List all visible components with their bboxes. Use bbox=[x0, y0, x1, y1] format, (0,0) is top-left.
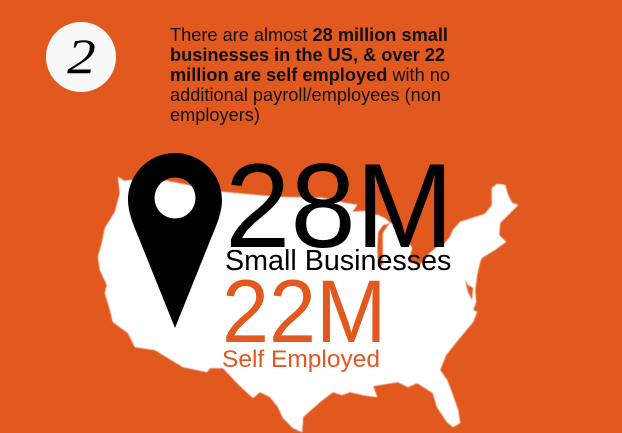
statistic: 22M: 22M bbox=[222, 262, 386, 361]
intro text: businesses in the US, & over 22 bbox=[170, 45, 445, 65]
label: Small Businesses: Small Businesses bbox=[225, 245, 451, 277]
intro text: There are almost 28 million small bbox=[170, 25, 448, 45]
intro text: additional payroll/employees (non bbox=[170, 85, 441, 105]
statistic: 28M: 28M bbox=[225, 139, 454, 273]
label: Self Employed: Self Employed bbox=[222, 346, 380, 373]
map of the United States bbox=[98, 177, 518, 432]
icon: location pin bbox=[128, 153, 222, 328]
intro text: employers) bbox=[170, 105, 260, 125]
number badge bbox=[46, 22, 116, 92]
intro text bbox=[170, 25, 450, 125]
number badge: 2 bbox=[67, 28, 95, 84]
Long Island Sound bbox=[480, 250, 497, 262]
intro text: million are self employed with no bbox=[170, 65, 450, 85]
Chesapeake Bay bbox=[465, 280, 473, 300]
